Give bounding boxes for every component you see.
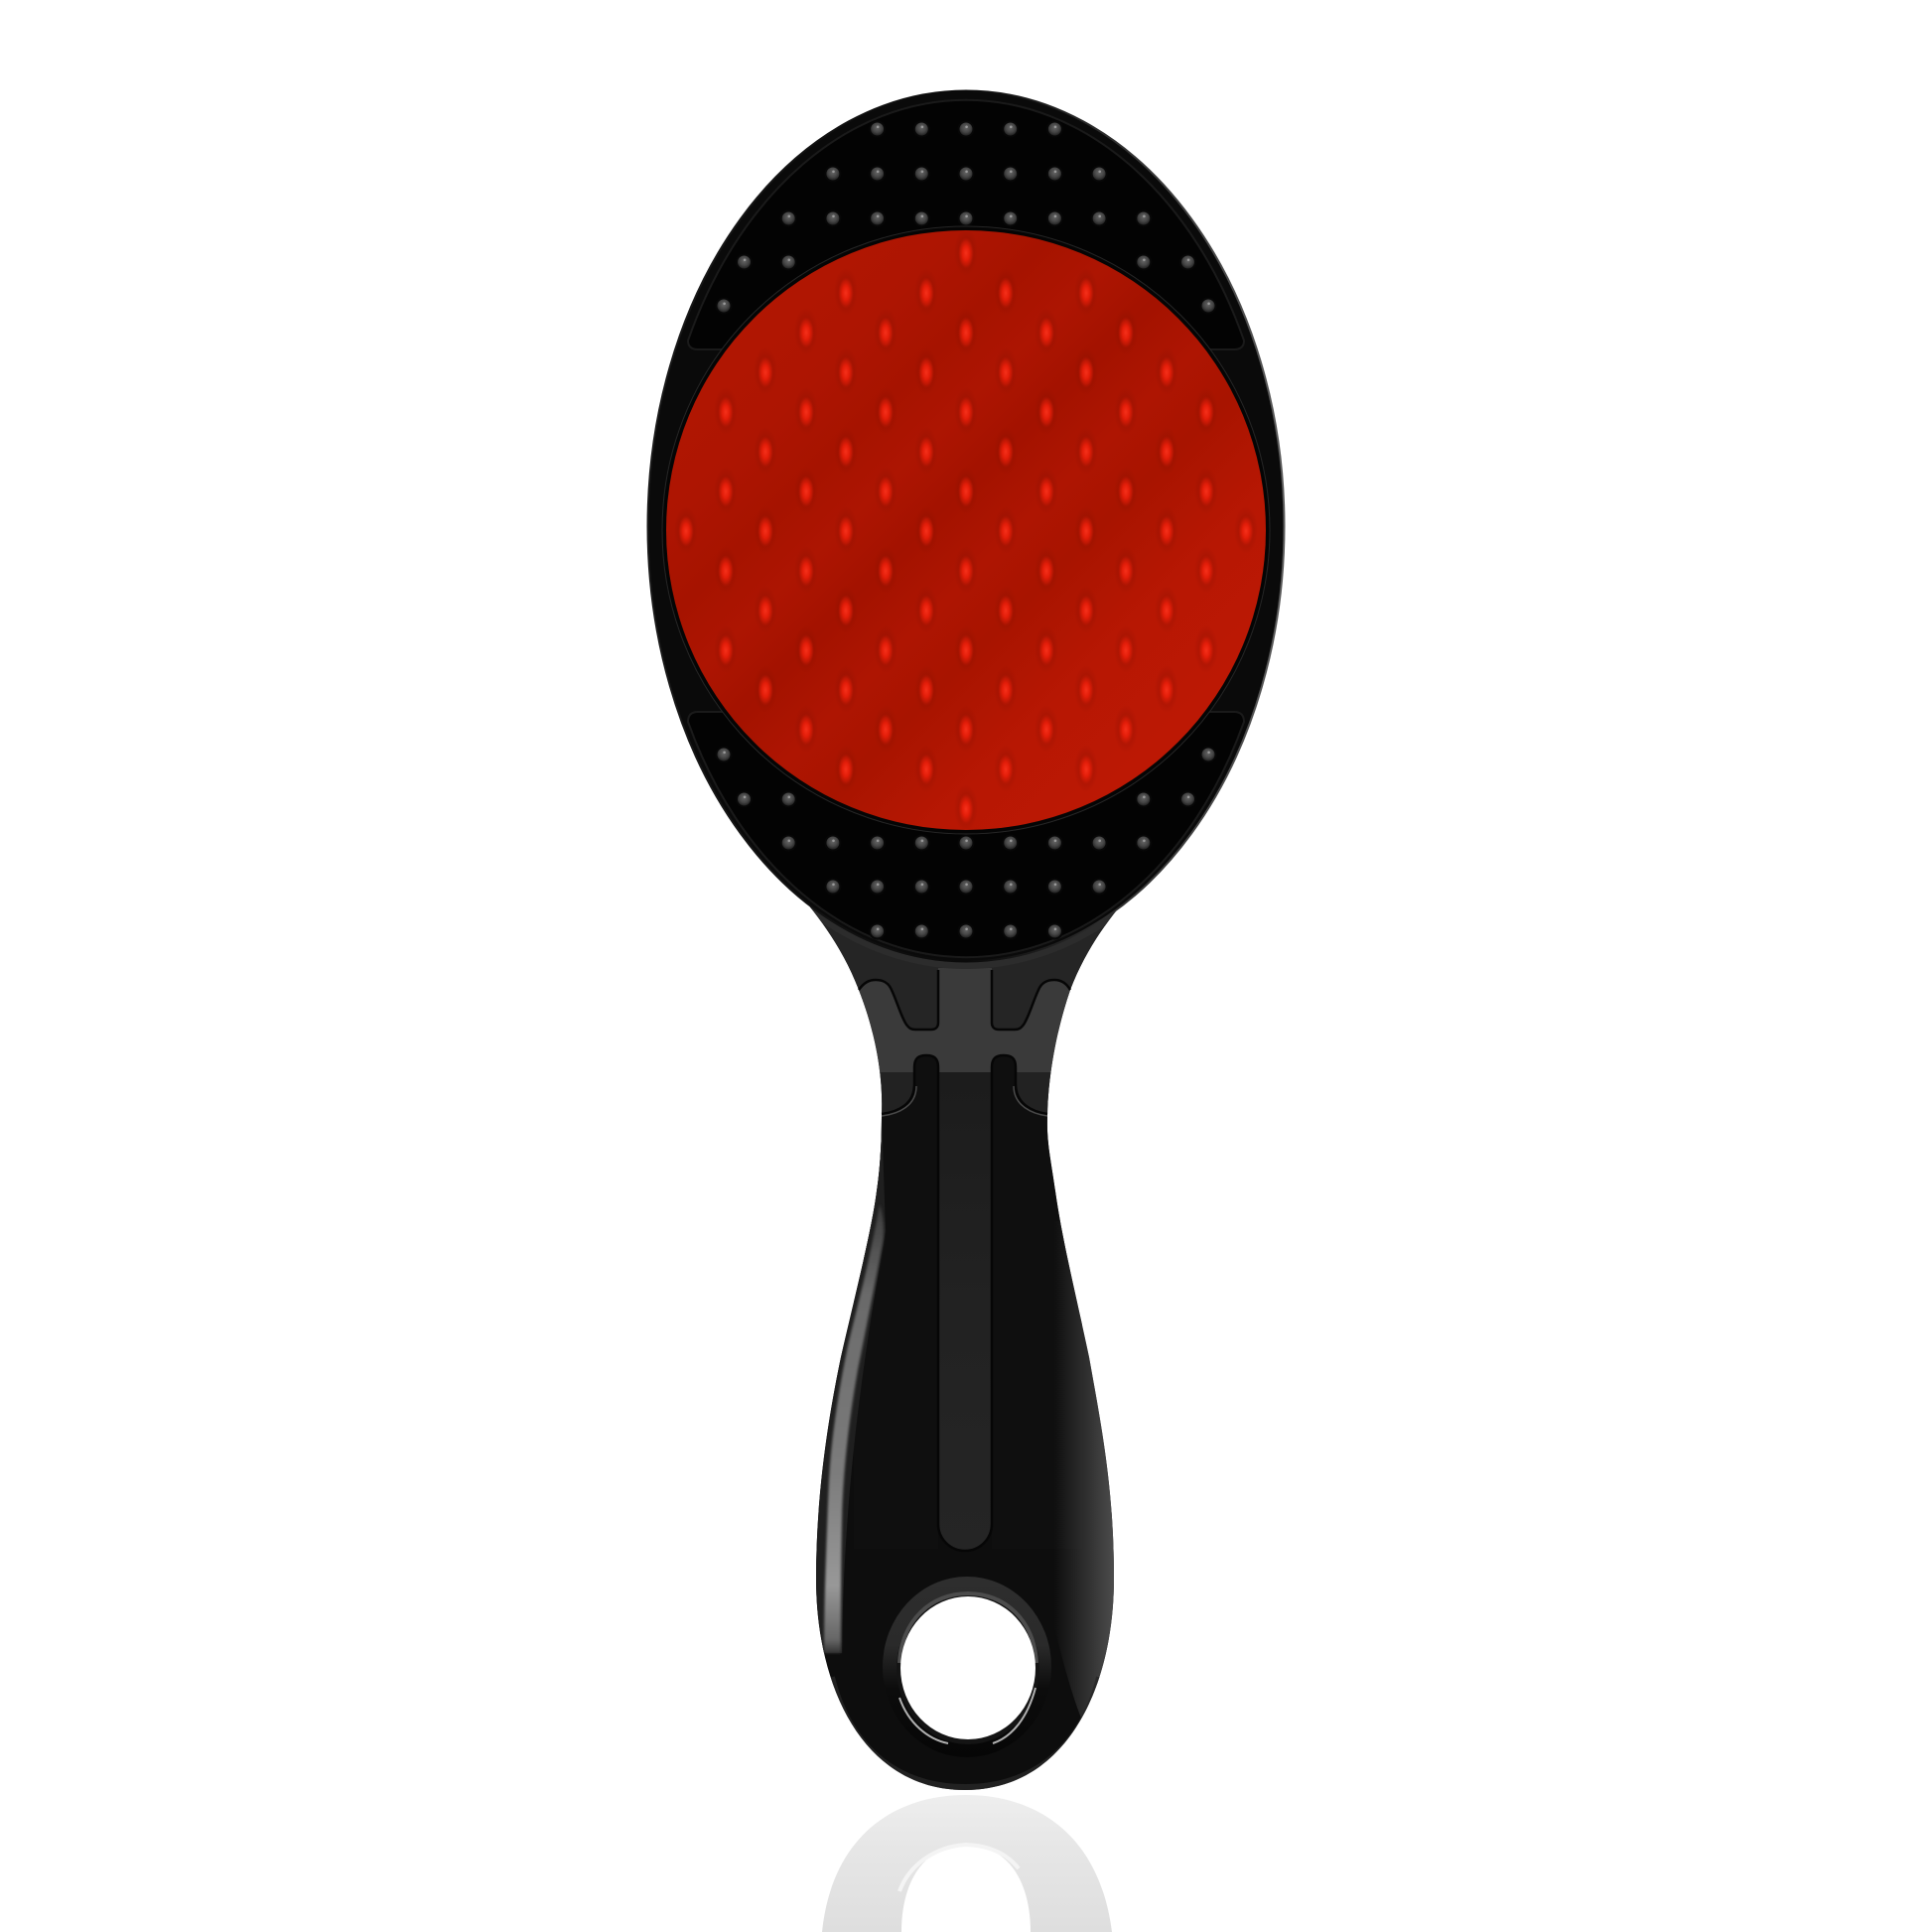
left gloss highlight bbox=[824, 1204, 884, 1653]
lower right grip section bbox=[993, 1056, 1082, 1324]
red cushion bbox=[662, 226, 1270, 834]
hang hole ring bbox=[883, 1577, 1051, 1757]
black bristle tips bbox=[715, 121, 1217, 939]
right soft highlight bbox=[1062, 1235, 1114, 1718]
red bristle tips bbox=[674, 228, 1258, 832]
neck H-shaped light panel bbox=[854, 968, 1077, 1072]
reflection of handle bbox=[822, 1795, 1112, 1932]
left edge sheen bbox=[816, 1120, 886, 1653]
handle bbox=[810, 906, 1116, 1790]
head top panel bbox=[688, 100, 1244, 349]
hair brush illustration bbox=[647, 89, 1285, 1932]
head rim band on neck bbox=[810, 907, 1116, 969]
center strip bbox=[939, 1116, 991, 1550]
neck lower side panels bbox=[880, 1072, 1050, 1114]
bottom edge sheen bbox=[829, 1678, 1102, 1790]
head bottom panel bbox=[688, 712, 1244, 957]
lower left grip section bbox=[854, 1056, 937, 1302]
neck seam lines bbox=[859, 970, 1070, 1551]
brush head bbox=[647, 90, 1285, 962]
neck upper panel bbox=[810, 907, 1116, 1033]
